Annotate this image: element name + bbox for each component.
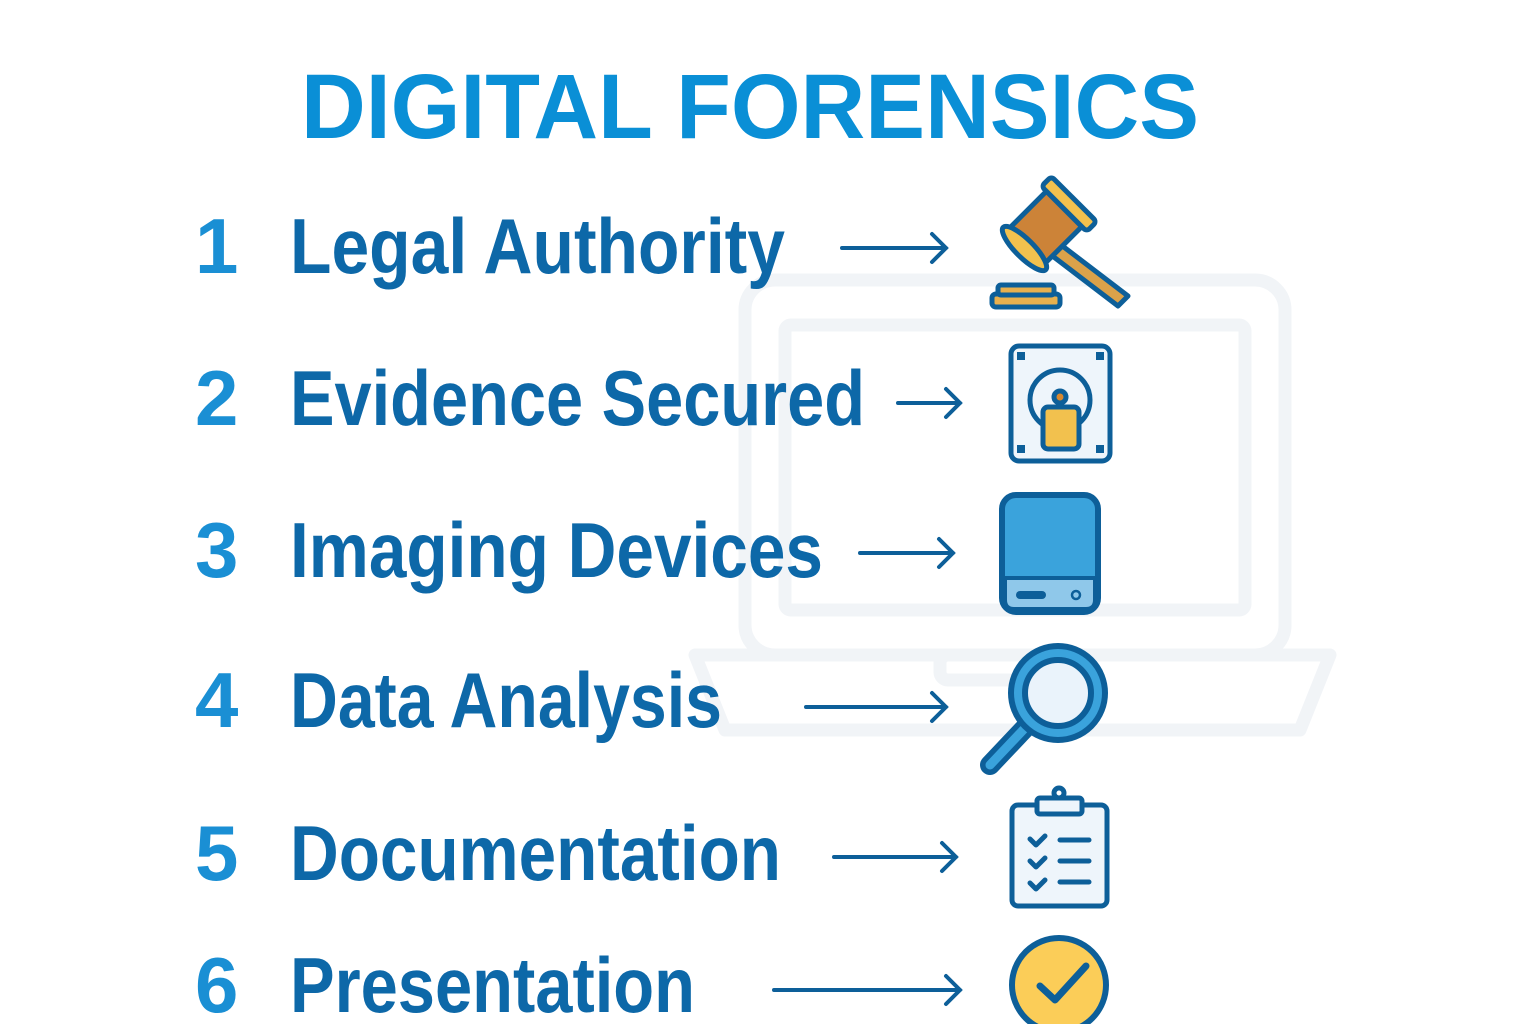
step 4: Data Analysis <box>290 656 722 744</box>
arrow 4 <box>806 693 946 721</box>
step 5: 5 <box>195 809 238 897</box>
arrow 6 <box>774 976 960 1004</box>
arrow 2 <box>898 389 960 417</box>
icon: gavel <box>992 176 1128 307</box>
arrow 3 <box>860 539 953 567</box>
title: DIGITAL FORENSICS <box>301 56 1199 158</box>
step 5: Documentation <box>290 809 781 897</box>
step 2: Evidence Secured <box>290 354 865 442</box>
step 1: 1 <box>195 202 238 290</box>
icon: secured hard drive <box>1011 346 1110 461</box>
step 3: Imaging Devices <box>290 506 823 594</box>
arrow 1 <box>842 234 946 262</box>
step 4: 4 <box>195 656 238 744</box>
background laptop watermark <box>695 280 1330 730</box>
step 3: 3 <box>195 506 238 594</box>
icon: storage drive <box>1002 495 1098 612</box>
step 1: Legal Authority <box>290 202 785 290</box>
icon: check circle <box>1012 938 1106 1024</box>
step 2: 2 <box>195 354 238 442</box>
icon: clipboard checklist <box>1012 788 1107 906</box>
icon: magnifier <box>990 646 1105 765</box>
arrow 5 <box>834 843 956 871</box>
